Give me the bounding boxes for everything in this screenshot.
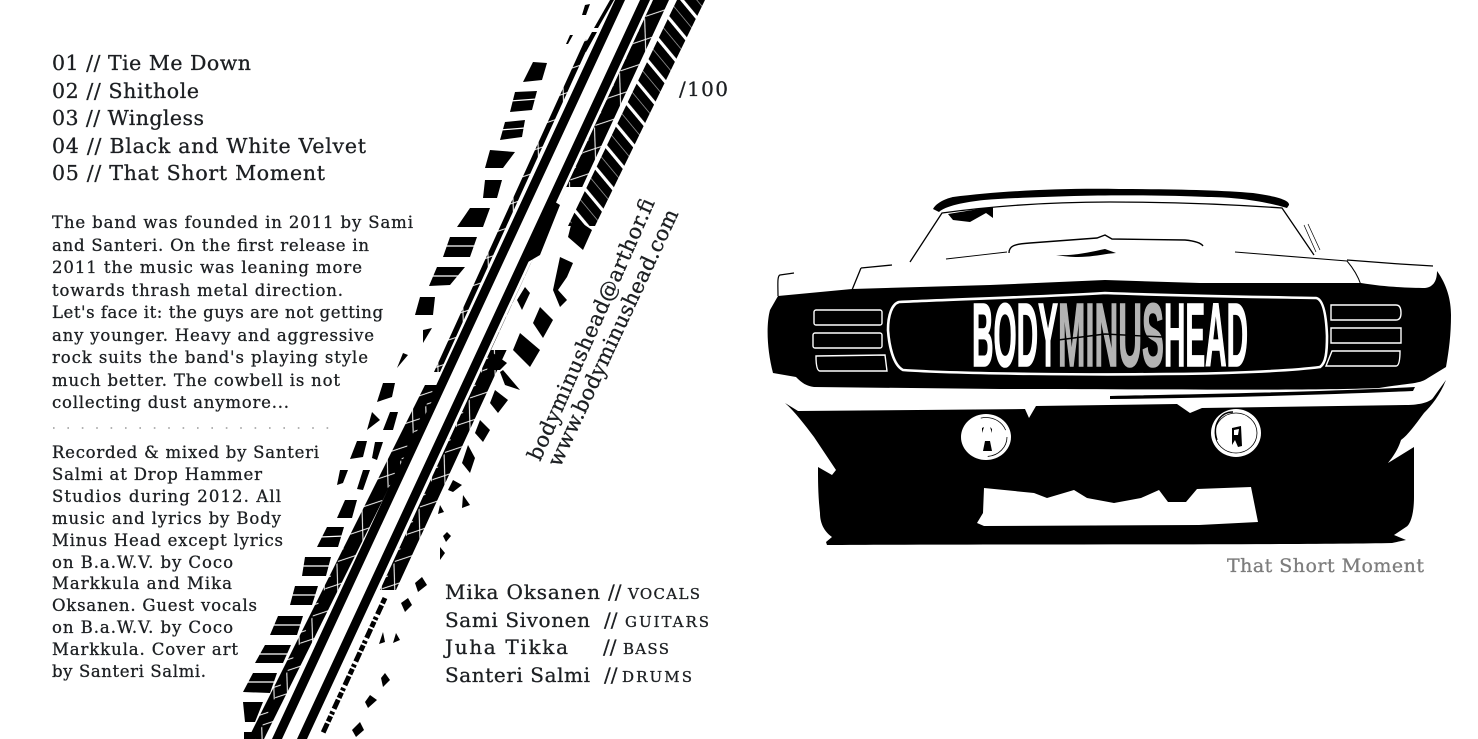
solid tire stripes	[272, 0, 650, 739]
band members: Juha Tikka	[443, 635, 568, 659]
band biography text: 2011 the music was leaning more	[52, 258, 362, 277]
band biography text	[52, 213, 413, 412]
recording credits text: Markkula and Mika	[52, 574, 232, 593]
track list: 01 // Tie Me Down	[52, 51, 251, 75]
hood scoop	[1056, 249, 1116, 257]
band members: DRUMS	[622, 668, 692, 686]
lower body	[785, 380, 1446, 545]
rotated contact lines: bodyminushead@arthor.fi	[523, 195, 660, 464]
album title caption: That Short Moment	[1227, 555, 1424, 577]
right fragmented tread marks	[352, 217, 592, 737]
recording credits text: Minus Head except lyrics	[52, 531, 283, 550]
track list	[52, 51, 367, 185]
upper body	[768, 271, 1451, 390]
band members: Sami Sivonen	[445, 608, 590, 632]
edition number: /100	[679, 77, 728, 101]
car roof	[933, 189, 1289, 212]
hood lines	[778, 224, 1433, 296]
recording credits text: music and lyrics by Body	[52, 509, 282, 528]
track list: 04 // Black and White Velvet	[52, 134, 367, 158]
band members	[443, 580, 709, 687]
windshield outline	[910, 202, 1314, 262]
rear view mirror mark	[948, 207, 993, 222]
band biography text: any younger. Heavy and aggressive	[52, 326, 374, 345]
left tread blocks	[243, 62, 547, 739]
band members: //	[608, 580, 622, 604]
band biography text: rock suits the band's playing style	[52, 348, 368, 367]
band logo: BODY	[972, 286, 1058, 386]
stripe wear blob	[526, 200, 560, 262]
right tread blocks	[568, 0, 705, 226]
tire track graphic	[243, 0, 705, 739]
band logo: MINUS	[1058, 286, 1164, 386]
recording credits text: by Santeri Salmi.	[52, 662, 206, 681]
band biography text: much better. The cowbell is not	[52, 371, 340, 390]
recording credits text: Salmi at Drop Hammer	[52, 465, 262, 484]
band biography text: collecting dust anymore...	[52, 393, 289, 412]
band members: VOCALS	[627, 585, 700, 603]
band members: //	[604, 608, 618, 632]
left side light trims	[813, 310, 887, 371]
recording credits text: Markkula. Cover art	[52, 640, 238, 659]
recording credits text: Recorded & mixed by Santeri	[52, 443, 319, 462]
band biography text: and Santeri. On the first release in	[52, 236, 369, 255]
recording credits text: Studios during 2012. All	[52, 487, 281, 506]
left lattice band	[248, 385, 440, 739]
bumper streak	[1110, 387, 1415, 399]
track list: 05 // That Short Moment	[52, 161, 326, 185]
band biography text: towards thrash metal direction.	[52, 281, 343, 300]
grille trim	[888, 293, 1327, 374]
band members: //	[603, 635, 617, 659]
right fog light	[1211, 409, 1261, 457]
left fog light	[961, 414, 1011, 460]
track list: 03 // Wingless	[52, 106, 204, 130]
logo split line	[1058, 334, 1163, 340]
license plate area	[977, 487, 1258, 526]
band biography text: Let's face it: the guys are not getting	[52, 303, 383, 322]
upper left worn lattice	[434, 38, 592, 372]
recording credits text: Oksanen. Guest vocals	[52, 596, 257, 615]
fragmented bottom lattice	[322, 598, 385, 735]
band members: GUITARS	[625, 613, 709, 631]
upper worn specks	[566, 0, 614, 52]
band members: Santeri Salmi	[445, 663, 590, 687]
band members: BASS	[623, 640, 669, 658]
car illustration	[768, 189, 1451, 545]
recording credits text	[52, 443, 319, 681]
track list: 02 // Shithole	[52, 79, 199, 103]
recording credits text: on B.a.W.V. by Coco	[52, 553, 233, 572]
rotated contact lines: www.bodyminushead.com	[543, 205, 683, 470]
right lattice band	[380, 0, 669, 590]
dotted separator	[53, 427, 329, 429]
white lines in left tread blocks	[245, 99, 537, 682]
band biography text: The band was founded in 2011 by Sami	[52, 213, 413, 232]
recording credits text: on B.a.W.V. by Coco	[52, 618, 233, 637]
white tread wear marks	[491, 187, 584, 350]
car illustration: HEAD	[1164, 286, 1248, 386]
right side light trims	[1326, 305, 1401, 366]
band members: Mika Oksanen	[445, 580, 600, 604]
band members: //	[604, 663, 618, 687]
